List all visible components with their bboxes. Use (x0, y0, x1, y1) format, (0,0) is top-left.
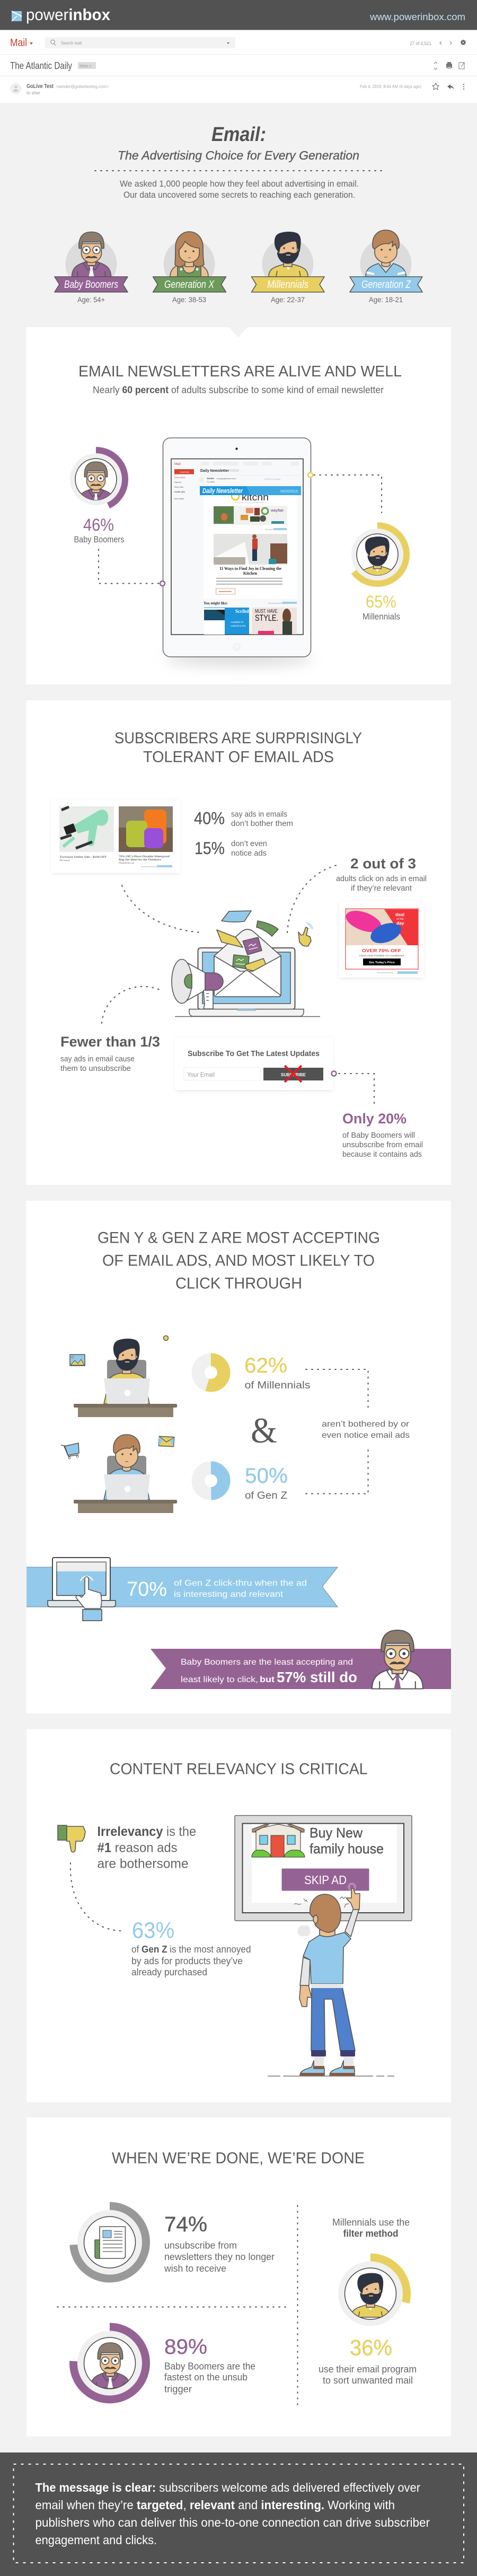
image: hair dryer (59, 806, 114, 852)
search box: Search mail (61, 40, 82, 46)
text: irrelevancy: are bothersome (98, 1857, 189, 1871)
stat: 40% (194, 809, 293, 828)
title: Email: (211, 124, 266, 146)
paper yellow 2 (245, 959, 266, 971)
inbox tag (78, 62, 96, 69)
ad card: products: 70% Off 3-Piece Durable Waterproof (119, 855, 170, 858)
bracket label: even notice email ads (322, 1431, 410, 1440)
ad card: products: Exclusive Online Sale - $100 OFF (60, 855, 107, 859)
icon: newspaper (95, 2227, 125, 2258)
inbox tag: Inbox x (80, 63, 92, 68)
bracket connector (306, 1369, 368, 1494)
stat: 50% of gen z: 50% (245, 1464, 288, 1488)
email screenshot (174, 462, 301, 635)
ad card: deal of the day: Recommended by (377, 972, 393, 974)
email screenshot: Recommended by (268, 602, 284, 604)
email screenshot: kitchn (242, 492, 269, 503)
donut: baby boomers 46% (67, 450, 125, 508)
stat: fewer than 1/3 (60, 1034, 160, 1073)
email screenshot: Drafts (30) (174, 490, 185, 493)
button: skip ad: SKIP AD (304, 1873, 347, 1887)
stat: 50% of gen z: of Gen Z (245, 1490, 287, 1501)
stat: only 20%: Only 20% (342, 1111, 407, 1127)
heading: SUBSCRIBERS ARE SURPRISINGLY (114, 729, 362, 747)
stat: 2 out of 3: if they’re relevant (351, 884, 412, 893)
heading: GEN Y & GEN Z ARE MOST ACCEPTING (98, 1229, 380, 1247)
stat: 36% (319, 2335, 417, 2386)
icon: picture (70, 1355, 85, 1366)
stat: 89%: 89% (164, 2335, 207, 2359)
illustration: boomer in white shirt (372, 1630, 423, 1689)
pie: 50% (198, 1468, 224, 1493)
ad card: deal of the day: deal (395, 912, 404, 917)
ad card: deal of the day: of the (396, 918, 404, 921)
stat: 40%: 40% (194, 809, 225, 828)
connector: boomers to tablet (99, 549, 165, 586)
banner: baby boomers 57%: 57% still do (277, 1669, 357, 1685)
text: irrelevancy (98, 1824, 196, 1871)
email screenshot: Daily Newsletter (200, 469, 229, 473)
paper blue (222, 911, 251, 922)
ad: Scribd: Scribd (235, 609, 249, 614)
stat: 46% (74, 515, 124, 544)
donut: 36% millennials (334, 2257, 407, 2330)
ad card: deal of the day: Hand Held Portable Air Conditioner (359, 954, 405, 957)
text: filter method: filter method (343, 2228, 399, 2239)
persona: Generation X: Age: 38-53 (172, 295, 206, 304)
text: irrelevancy: #1 reason ads (98, 1841, 177, 1856)
button: skip ad (282, 1868, 369, 1891)
stat: 63% (131, 1918, 251, 1977)
stat: 15%: notice ads (231, 849, 267, 858)
card green (233, 955, 249, 969)
persona: Generation Z: Generation Z (361, 279, 411, 291)
email screenshot: 8:15 AM (1 hour ago) (264, 478, 280, 480)
subject: The Atlantic Daily (10, 60, 72, 71)
heading: EMAIL NEWSLETTERS ARE ALIVE AND WELL (78, 363, 402, 380)
subtitle: The Advertising Choice for Every Generation (118, 148, 359, 162)
banner: baby boomers 57% (151, 1630, 451, 1689)
illustration: monitor: Buy New (310, 1825, 363, 1841)
persona: Generation X: Generation X (164, 279, 215, 291)
ad card: products: Dermstore (59, 859, 70, 861)
banner: 70% gen z: is interesting and relevant (174, 1590, 284, 1599)
conclusion text (35, 2481, 430, 2547)
stat: 63%: of Gen Z is the most annoyed (131, 1944, 251, 1955)
stat: 63%: already purchased (131, 1967, 207, 1977)
stat: only 20% (342, 1111, 423, 1159)
subscribe card: Your Email (187, 1071, 215, 1078)
illustration: email and megaphone (172, 911, 320, 1017)
mail label: Mail (10, 37, 27, 49)
stat: 15%: don’t even (231, 839, 267, 848)
website url: www.powerinbox.com (369, 12, 465, 22)
ad: Scribd: Android & iOS (231, 625, 246, 627)
image: dry bags (119, 806, 173, 852)
banner: baby boomers 57%: least likely to click, (181, 1675, 258, 1684)
subscribe card: Subscribe To Get The Latest Updates (188, 1049, 320, 1058)
ad card: deal of the day: day (396, 920, 404, 926)
stat: 74%: 74% (164, 2213, 207, 2236)
sender line: GoLive Test (26, 83, 54, 90)
panel: gen y and gen z (26, 1201, 451, 1713)
email screenshot: Recommended by (265, 529, 280, 531)
email screenshot: 11 Ways to Find Joy in Cleaning the (219, 566, 281, 571)
stat: 36%: use their email program (319, 2364, 417, 2375)
text: irrelevancy: Irrelevancy is the (98, 1824, 196, 1839)
ad card: deal of the day: OVER 70% OFF (362, 948, 401, 953)
email screenshot: Sent Mail (174, 486, 183, 488)
stat: fewer than 1/3: them to unsubscribe (60, 1064, 131, 1073)
ad: must have style: MUST. HAVE. (255, 609, 278, 614)
ad card: deal of the day (339, 901, 424, 978)
header bar (0, 0, 477, 30)
banner: 70% gen z: of Gen Z click-thru when the ad (174, 1579, 307, 1588)
ad card: products: Bag Set Ideal for the Outdoors (119, 858, 161, 861)
sender line: to sher (26, 90, 40, 95)
stat: only 20%: because it contains ads (342, 1150, 422, 1159)
ad card: products: PlushDeals.com (118, 861, 135, 864)
connector: subscribe to 20% (332, 1071, 374, 1104)
email screenshot: Kitchen (243, 571, 258, 576)
ad: Scribd (204, 608, 249, 635)
subscribe card (175, 1038, 333, 1091)
ampersand: & (251, 1410, 277, 1450)
conclusion text: The message is clear: subscribers welcome ads delivered effectively over (35, 2481, 420, 2494)
stat: 89%: fastest on the unsub (164, 2372, 248, 2382)
icon: laptop with hand (48, 1558, 116, 1621)
email screenshot: Daily Newsletter (202, 487, 243, 495)
panel: tolerant of ads (26, 700, 451, 1185)
image: furniture ad (214, 506, 287, 525)
stat: fewer than 1/3: say ads in email cause (60, 1054, 135, 1063)
email screenshot: To: sarah (207, 481, 215, 483)
stat: 2 out of 3: adults click on ads in email (336, 874, 427, 883)
text: filter method: Millennials use the (332, 2217, 410, 2228)
email screenshot: 04/20/2016 (280, 490, 298, 494)
text: filter method (332, 2217, 410, 2239)
footer (0, 2452, 477, 2576)
message count and nav: 27 of 4,521 (410, 41, 431, 46)
donut: 89% baby boomers (73, 2327, 146, 2399)
email screenshot: <noreply@sender.com> (216, 478, 236, 480)
stat: 2 out of 3 (336, 856, 427, 893)
toolbar icons (434, 62, 464, 69)
stat: 36%: to sort unwanted mail (323, 2375, 413, 2386)
stat: 15% (195, 839, 267, 858)
icon: cart (61, 1443, 79, 1459)
heading: CONTENT RELEVANCY IS CRITICAL (110, 1760, 368, 1778)
illustration: monitor (235, 1815, 412, 1921)
stat: 63%: by ads for products they’ve (131, 1956, 243, 1966)
ad: Scribd: Available for (231, 621, 244, 623)
icon: house (252, 1824, 305, 1857)
illustration: millennial at laptop (74, 1339, 177, 1417)
persona: Millennials: Millennials (267, 279, 308, 291)
email screenshot: Sender (207, 477, 215, 480)
ad: must have style: STYLE. (255, 613, 278, 623)
envelope front (214, 956, 281, 997)
persona: Baby Boomers: Age: 54+ (77, 295, 105, 304)
ad: must have style (252, 608, 297, 635)
intro text: Our data uncovered some secrets to reaching each generation. (123, 190, 355, 200)
conclusion text: publishers who can deliver this one-to-one connection can drive subscriber (35, 2516, 430, 2529)
stat: 89%: Baby Boomers are the (164, 2361, 255, 2372)
stat: 89%: trigger (164, 2384, 192, 2394)
persona: Millennials: Age: 22-37 (271, 295, 305, 304)
persona: Baby Boomers (55, 232, 128, 304)
paper yellow (217, 930, 243, 947)
image: kitchen photo (214, 534, 287, 565)
panel: when we're done (26, 2117, 451, 2437)
connector: tablet to millennials (308, 473, 382, 513)
persona: Generation X (153, 232, 226, 304)
sender line (26, 83, 109, 95)
logo wordmark: powerinbox (26, 5, 111, 24)
ad card: products: Recommended by (141, 866, 156, 868)
icon: logo envelope (12, 11, 22, 21)
stat: 2 out of 3: 2 out of 3 (350, 856, 416, 872)
email screenshot: Starred (174, 481, 181, 483)
pie: 62% (198, 1360, 224, 1385)
envelope back (214, 929, 281, 997)
heading: WHEN WE’RE DONE, WE’RE DONE (112, 2149, 365, 2167)
panel: content relevancy (26, 1729, 451, 2103)
banner: baby boomers 57%: Baby Boomers are the least accepting and (181, 1658, 353, 1667)
stat: 15%: 15% (195, 839, 225, 858)
tablet (163, 438, 313, 666)
bracket label: aren’t bothered by or (322, 1420, 410, 1429)
ad card: deal of the day: See Today’s Price (369, 961, 395, 964)
intro text: We asked 1,000 people how they feel about advertising in email. (120, 179, 359, 189)
stat: 74%: unsubscribe from (164, 2240, 237, 2251)
heading: CLICK THROUGH (175, 1274, 302, 1293)
connector curve (70, 1863, 121, 1931)
heading (114, 729, 362, 766)
email screenshot: Mail (174, 462, 181, 466)
paper green curved (257, 921, 278, 936)
message count and nav (410, 40, 465, 46)
image: furniture ad: wayfair (270, 509, 284, 513)
stat: fewer than 1/3: Fewer than 1/3 (60, 1034, 160, 1050)
stat: only 20%: of Baby Boomers will (342, 1131, 415, 1140)
red cross (285, 1066, 302, 1082)
heading: TOLERANT OF EMAIL ADS (143, 749, 334, 766)
icon: coin (163, 1336, 169, 1340)
stat: 89% (164, 2335, 255, 2394)
persona: Generation Z: Age: 18-21 (369, 295, 403, 304)
stat: 74%: newsletters they no longer (164, 2252, 275, 2262)
stat: 62% of millennials: 62% (244, 1354, 287, 1377)
banner: 70% gen z (26, 1558, 338, 1621)
icon: thumbs down (58, 1825, 85, 1852)
stat: only 20%: unsubscribe from email (342, 1140, 423, 1149)
message icons (432, 83, 464, 90)
stat: 65%: 65% (366, 592, 396, 611)
illustration: monitor: family house (310, 1841, 384, 1857)
card purple (243, 937, 262, 955)
illustration: gen z at laptop (74, 1435, 177, 1513)
illustration: person pressing skip (268, 1883, 394, 2076)
stat: 40%: say ads in emails (231, 810, 287, 819)
banner: 70% gen z: 70% (127, 1578, 167, 1601)
stat: 40%: don’t bother them (231, 819, 293, 828)
connector curves (102, 865, 339, 1023)
intro text (120, 179, 359, 200)
laptop (175, 948, 320, 1017)
persona: Generation Z (350, 230, 422, 304)
sender avatar (11, 83, 21, 94)
email screenshot: More labels (174, 498, 184, 500)
donut: 74% newspaper (73, 2206, 146, 2279)
stat: 74%: wish to receive (164, 2263, 226, 2274)
search box (45, 37, 235, 48)
ad card: products (51, 799, 180, 873)
stat: 65% (363, 592, 400, 621)
email client chrome (0, 30, 477, 103)
stat: 36%: 36% (350, 2335, 392, 2360)
stat: 62% of millennials (244, 1354, 311, 1391)
sender line: <sender@golivetesting.com> (56, 84, 109, 89)
stat: 46%: Baby Boomers (74, 534, 124, 544)
date: Feb 4, 2019, 8:44 AM (6 days ago) (360, 84, 421, 89)
banner: baby boomers 57%: but (260, 1675, 275, 1684)
stat: 46%: 46% (83, 515, 114, 534)
icon: envelope (159, 1436, 174, 1447)
persona: Baby Boomers: Baby Boomers (64, 279, 118, 291)
persona: Millennials (251, 232, 324, 304)
heading: OF EMAIL ADS, AND MOST LIKELY TO (102, 1252, 375, 1269)
email screenshot: COMPOSE (180, 471, 190, 473)
stat: 74% (164, 2213, 275, 2274)
email screenshot: Inbox (816) (174, 476, 186, 479)
subscribe card: SUBSCRIBE (281, 1072, 306, 1077)
stat: 62% of millennials: of Millennials (245, 1380, 311, 1391)
conclusion text: email when they’re targeted, relevant and interesting. Working with (35, 2498, 395, 2512)
icon: tapping hand (298, 923, 313, 946)
stat: 63%: 63% (132, 1918, 174, 1944)
subheading: Nearly 60 percent of adults subscribe to some kind of email newsletter (93, 385, 384, 395)
megaphone (172, 960, 223, 1009)
stat: 65%: Millennials (363, 612, 400, 621)
stat: 50% of gen z (245, 1464, 288, 1501)
bracket label (322, 1420, 410, 1440)
heading (98, 1229, 380, 1293)
email screenshot: You might like: (204, 601, 228, 605)
donut: millennials 65% (348, 525, 407, 584)
conclusion text: engagement and clicks. (35, 2533, 157, 2547)
